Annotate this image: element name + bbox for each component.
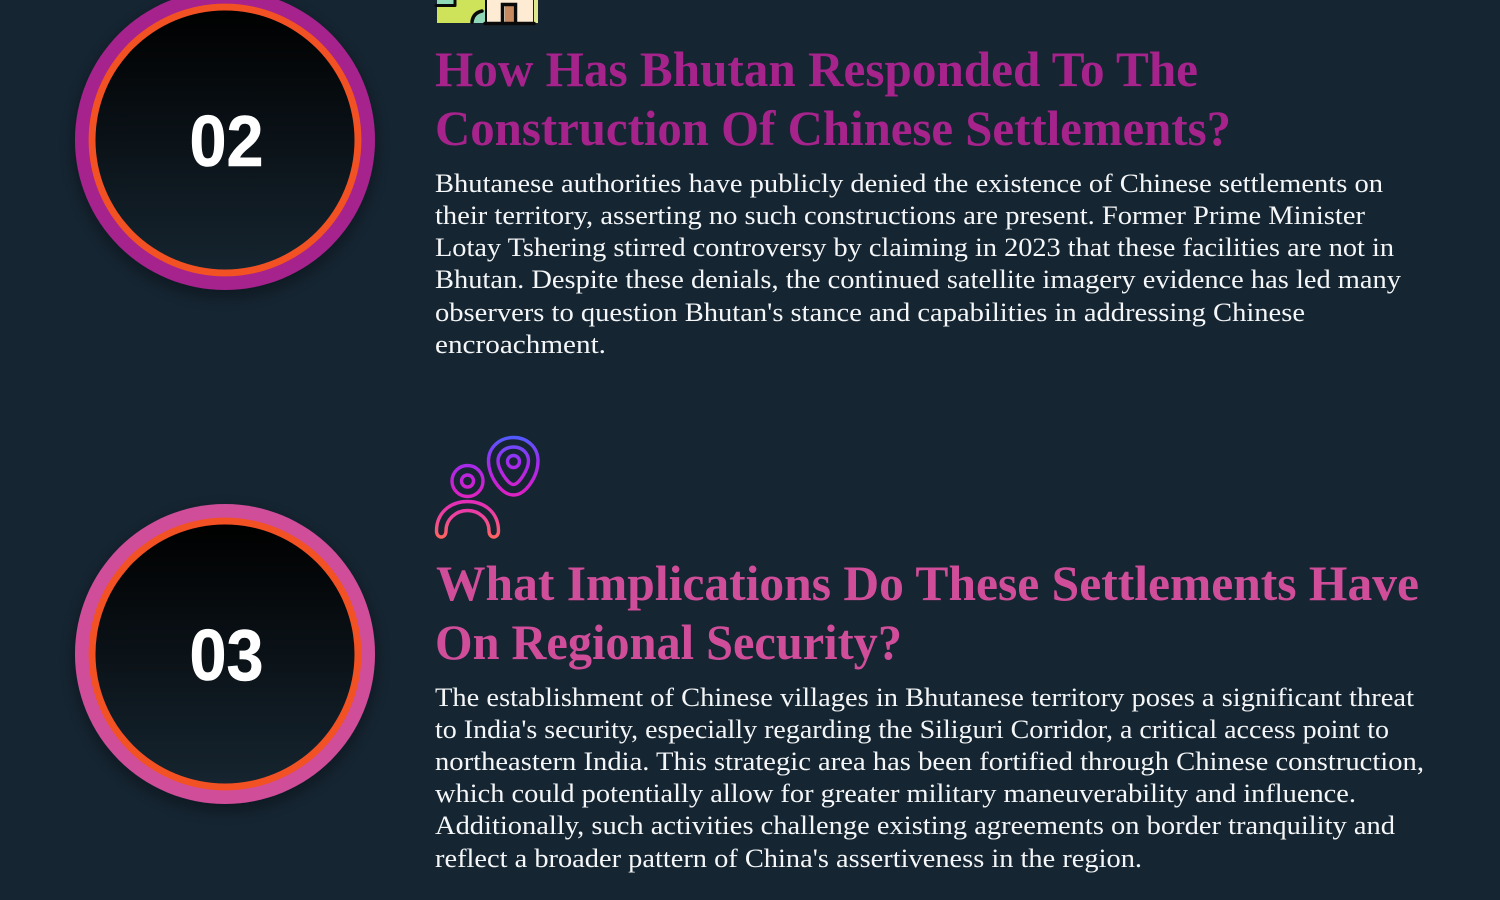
heading 02 <box>435 41 1231 156</box>
body text 03: northeastern India. This strategic area has been fortified through Chinese construction, <box>435 746 1424 776</box>
number badge 02: 02 <box>190 102 264 182</box>
body text 03 <box>435 682 1424 873</box>
body text 02: observers to question Bhutan's stance and capabilities in addressing Chinese <box>435 297 1305 327</box>
heading 03: On Regional Security? <box>435 614 902 670</box>
body text 02: encroachment. <box>435 329 606 359</box>
body text 03: The establishment of Chinese villages in Bhutanese territory poses a significant threat <box>435 682 1415 712</box>
body text 03: which could potentially allow for greater military maneuverability and influence. <box>435 778 1356 808</box>
body text 03: to India's security, especially regarding the Siliguri Corridor, a critical access point to <box>435 714 1389 744</box>
number badge 02 <box>75 0 375 290</box>
section 03 <box>75 438 1424 873</box>
body text 03: reflect a broader pattern of China's assertiveness in the region. <box>435 843 1142 873</box>
body text 02: their territory, asserting no such constructions are present. Former Prime Minister <box>435 200 1365 230</box>
body text 02 <box>435 168 1402 359</box>
body text 02: Lotay Tshering stirred controversy by claiming in 2023 that these facilities are not in <box>435 232 1394 262</box>
body text 02: Bhutan. Despite these denials, the continued satellite imagery evidence has led many <box>435 264 1402 294</box>
section 02 <box>75 0 1402 359</box>
heading 03: What Implications Do These Settlements Have <box>436 555 1419 611</box>
icon: map and house <box>436 0 538 24</box>
heading 03 <box>435 555 1419 670</box>
heading 02: Construction Of Chinese Settlements? <box>435 100 1231 156</box>
icon: person and location pin <box>436 438 538 537</box>
number badge 03: 03 <box>190 616 264 696</box>
heading 02: How Has Bhutan Responded To The <box>435 41 1198 97</box>
number badge 03 <box>75 504 375 804</box>
body text 02: Bhutanese authorities have publicly denied the existence of Chinese settlements on <box>435 168 1383 198</box>
body text 03: Additionally, such activities challenge existing agreements on border tranquility and <box>435 810 1395 840</box>
